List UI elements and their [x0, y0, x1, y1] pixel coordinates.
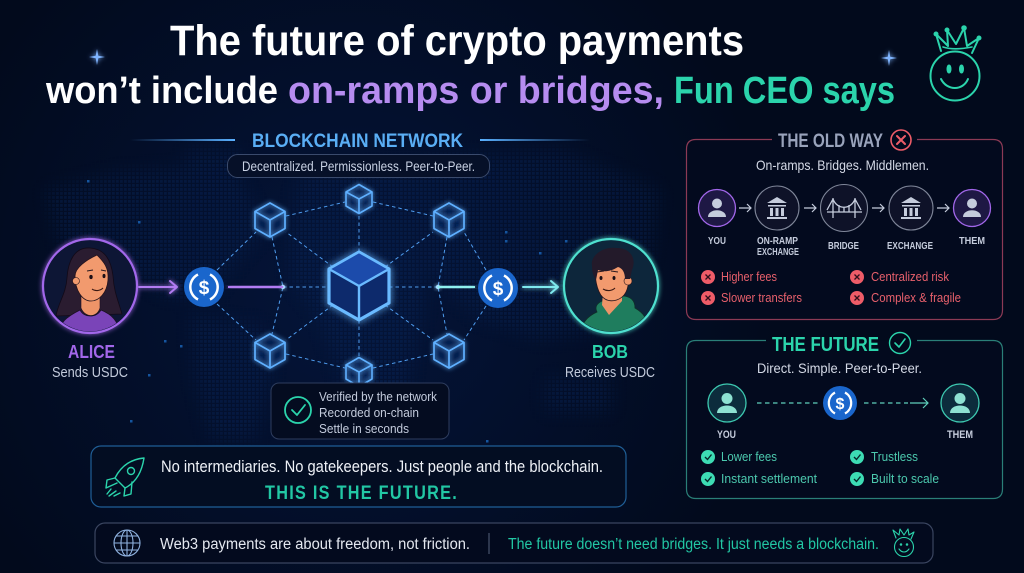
arrow [937, 204, 949, 212]
callout: verification: Recorded on-chain [319, 405, 419, 420]
icon: USDC right [478, 268, 518, 308]
flow: exchange: EXCHANGE [887, 240, 933, 252]
arrow [739, 204, 751, 212]
arrow: USDC to Bob [523, 281, 558, 293]
arrow [804, 204, 816, 212]
icon: globe [114, 530, 140, 556]
heading: blockchain network: BLOCKCHAIN NETWORK [252, 131, 463, 152]
panel: bottom bar: Web3 payments are about freedom, not friction. [160, 536, 470, 553]
label: Bob: BOB [592, 341, 628, 362]
cube: top left [255, 203, 285, 237]
flow: them: THEM [947, 429, 973, 441]
cube: top [346, 184, 372, 214]
label: Bob [565, 341, 655, 381]
network connections [217, 202, 486, 368]
panel: bottom bar [95, 523, 933, 563]
panel: this is the future: No intermediaries. No gatekeepers. Just people and the blockchain. [161, 458, 603, 476]
arrow [872, 204, 884, 212]
label: Bob: Receives USDC [565, 365, 655, 381]
icon: USDC right: $ [493, 279, 504, 300]
arrow: Alice to USDC [139, 281, 177, 293]
panel: the future: Direct. Simple. Peer-to-Peer. [757, 360, 922, 376]
flow: on-ramp exchange: EXCHANGE [757, 246, 799, 258]
benefits list: Lower fees [721, 449, 777, 464]
benefits list: Built to scale [871, 471, 939, 486]
flow: on-ramp exchange [755, 186, 799, 258]
drawbacks list: Centralized risk [871, 269, 949, 284]
pill: network properties [228, 154, 490, 178]
flow: you [708, 384, 746, 441]
drawbacks list [701, 269, 961, 305]
cube: bottom right [434, 334, 464, 368]
heading: the future: THE FUTURE [772, 334, 879, 356]
line: purple transfer [228, 286, 283, 288]
title: on-ramps or bridges, [288, 70, 664, 112]
arrow: dashed [864, 398, 928, 408]
drawbacks list: Slower transfers [721, 290, 802, 305]
icon: mini logo [893, 529, 914, 556]
dashed line [757, 402, 818, 404]
flow: them [941, 384, 979, 441]
drawbacks list: Higher fees [721, 269, 777, 284]
icon: USDC [823, 386, 857, 420]
flow: exchange [887, 186, 933, 252]
benefits list: Trustless [871, 449, 918, 464]
title [45, 17, 895, 112]
flow: them: THEM [959, 235, 985, 247]
callout: verification: Settle in seconds [319, 421, 409, 436]
flow: you: YOU [717, 429, 736, 441]
sparkle left [89, 49, 105, 65]
cube: top right [434, 203, 464, 237]
label: Alice [52, 341, 128, 381]
icon: USDC left: $ [199, 278, 210, 299]
cube: bottom left [255, 334, 285, 368]
label: Alice: ALICE [68, 341, 115, 362]
panel: the future [686, 332, 1002, 498]
node: right junction [436, 285, 440, 289]
callout: verification: Verified by the network [319, 389, 437, 404]
panel: the old way: On-ramps. Bridges. Middlemen. [756, 157, 929, 173]
icon: rocket [106, 458, 144, 496]
world map dot pattern [48, 150, 658, 442]
flow: them [954, 190, 990, 247]
flow: on-ramp exchange: ON-RAMP [757, 235, 798, 247]
title: The future of crypto payments [170, 17, 744, 65]
title: Fun CEO says [674, 70, 895, 112]
benefits list [701, 449, 939, 486]
pill: network properties: Decentralized. Permissionless. Peer-to-Peer. [242, 158, 475, 174]
panel: this is the future: THIS IS THE FUTURE. [265, 483, 458, 504]
flow: bridge: BRIDGE [828, 240, 859, 252]
title: won’t include [45, 70, 278, 112]
drawbacks list: Complex & fragile [871, 290, 961, 305]
node: left junction [281, 285, 285, 289]
cube: bottom [346, 358, 372, 386]
benefits list: Instant settlement [721, 471, 817, 486]
icon: USDC: $ [836, 396, 845, 413]
panel: this is the future [91, 446, 626, 507]
avatar: Alice [43, 239, 137, 340]
flow: bridge [820, 184, 868, 252]
flow: you [698, 190, 736, 247]
label: Alice: Sends USDC [52, 365, 128, 381]
panel: the old way [686, 130, 1002, 320]
line: teal transfer [438, 286, 475, 288]
sparkle right [881, 50, 897, 66]
icon: USDC left [184, 267, 224, 307]
avatar: Bob [564, 239, 658, 340]
flow: you: YOU [708, 235, 726, 247]
panel: bottom bar: The future doesn’t need bridges. It just needs a blockchain. [508, 536, 879, 553]
cube: central [329, 252, 389, 320]
heading: the old way: THE OLD WAY [778, 131, 883, 152]
logo: smiley with crown [930, 26, 980, 101]
callout: verification [271, 383, 449, 439]
